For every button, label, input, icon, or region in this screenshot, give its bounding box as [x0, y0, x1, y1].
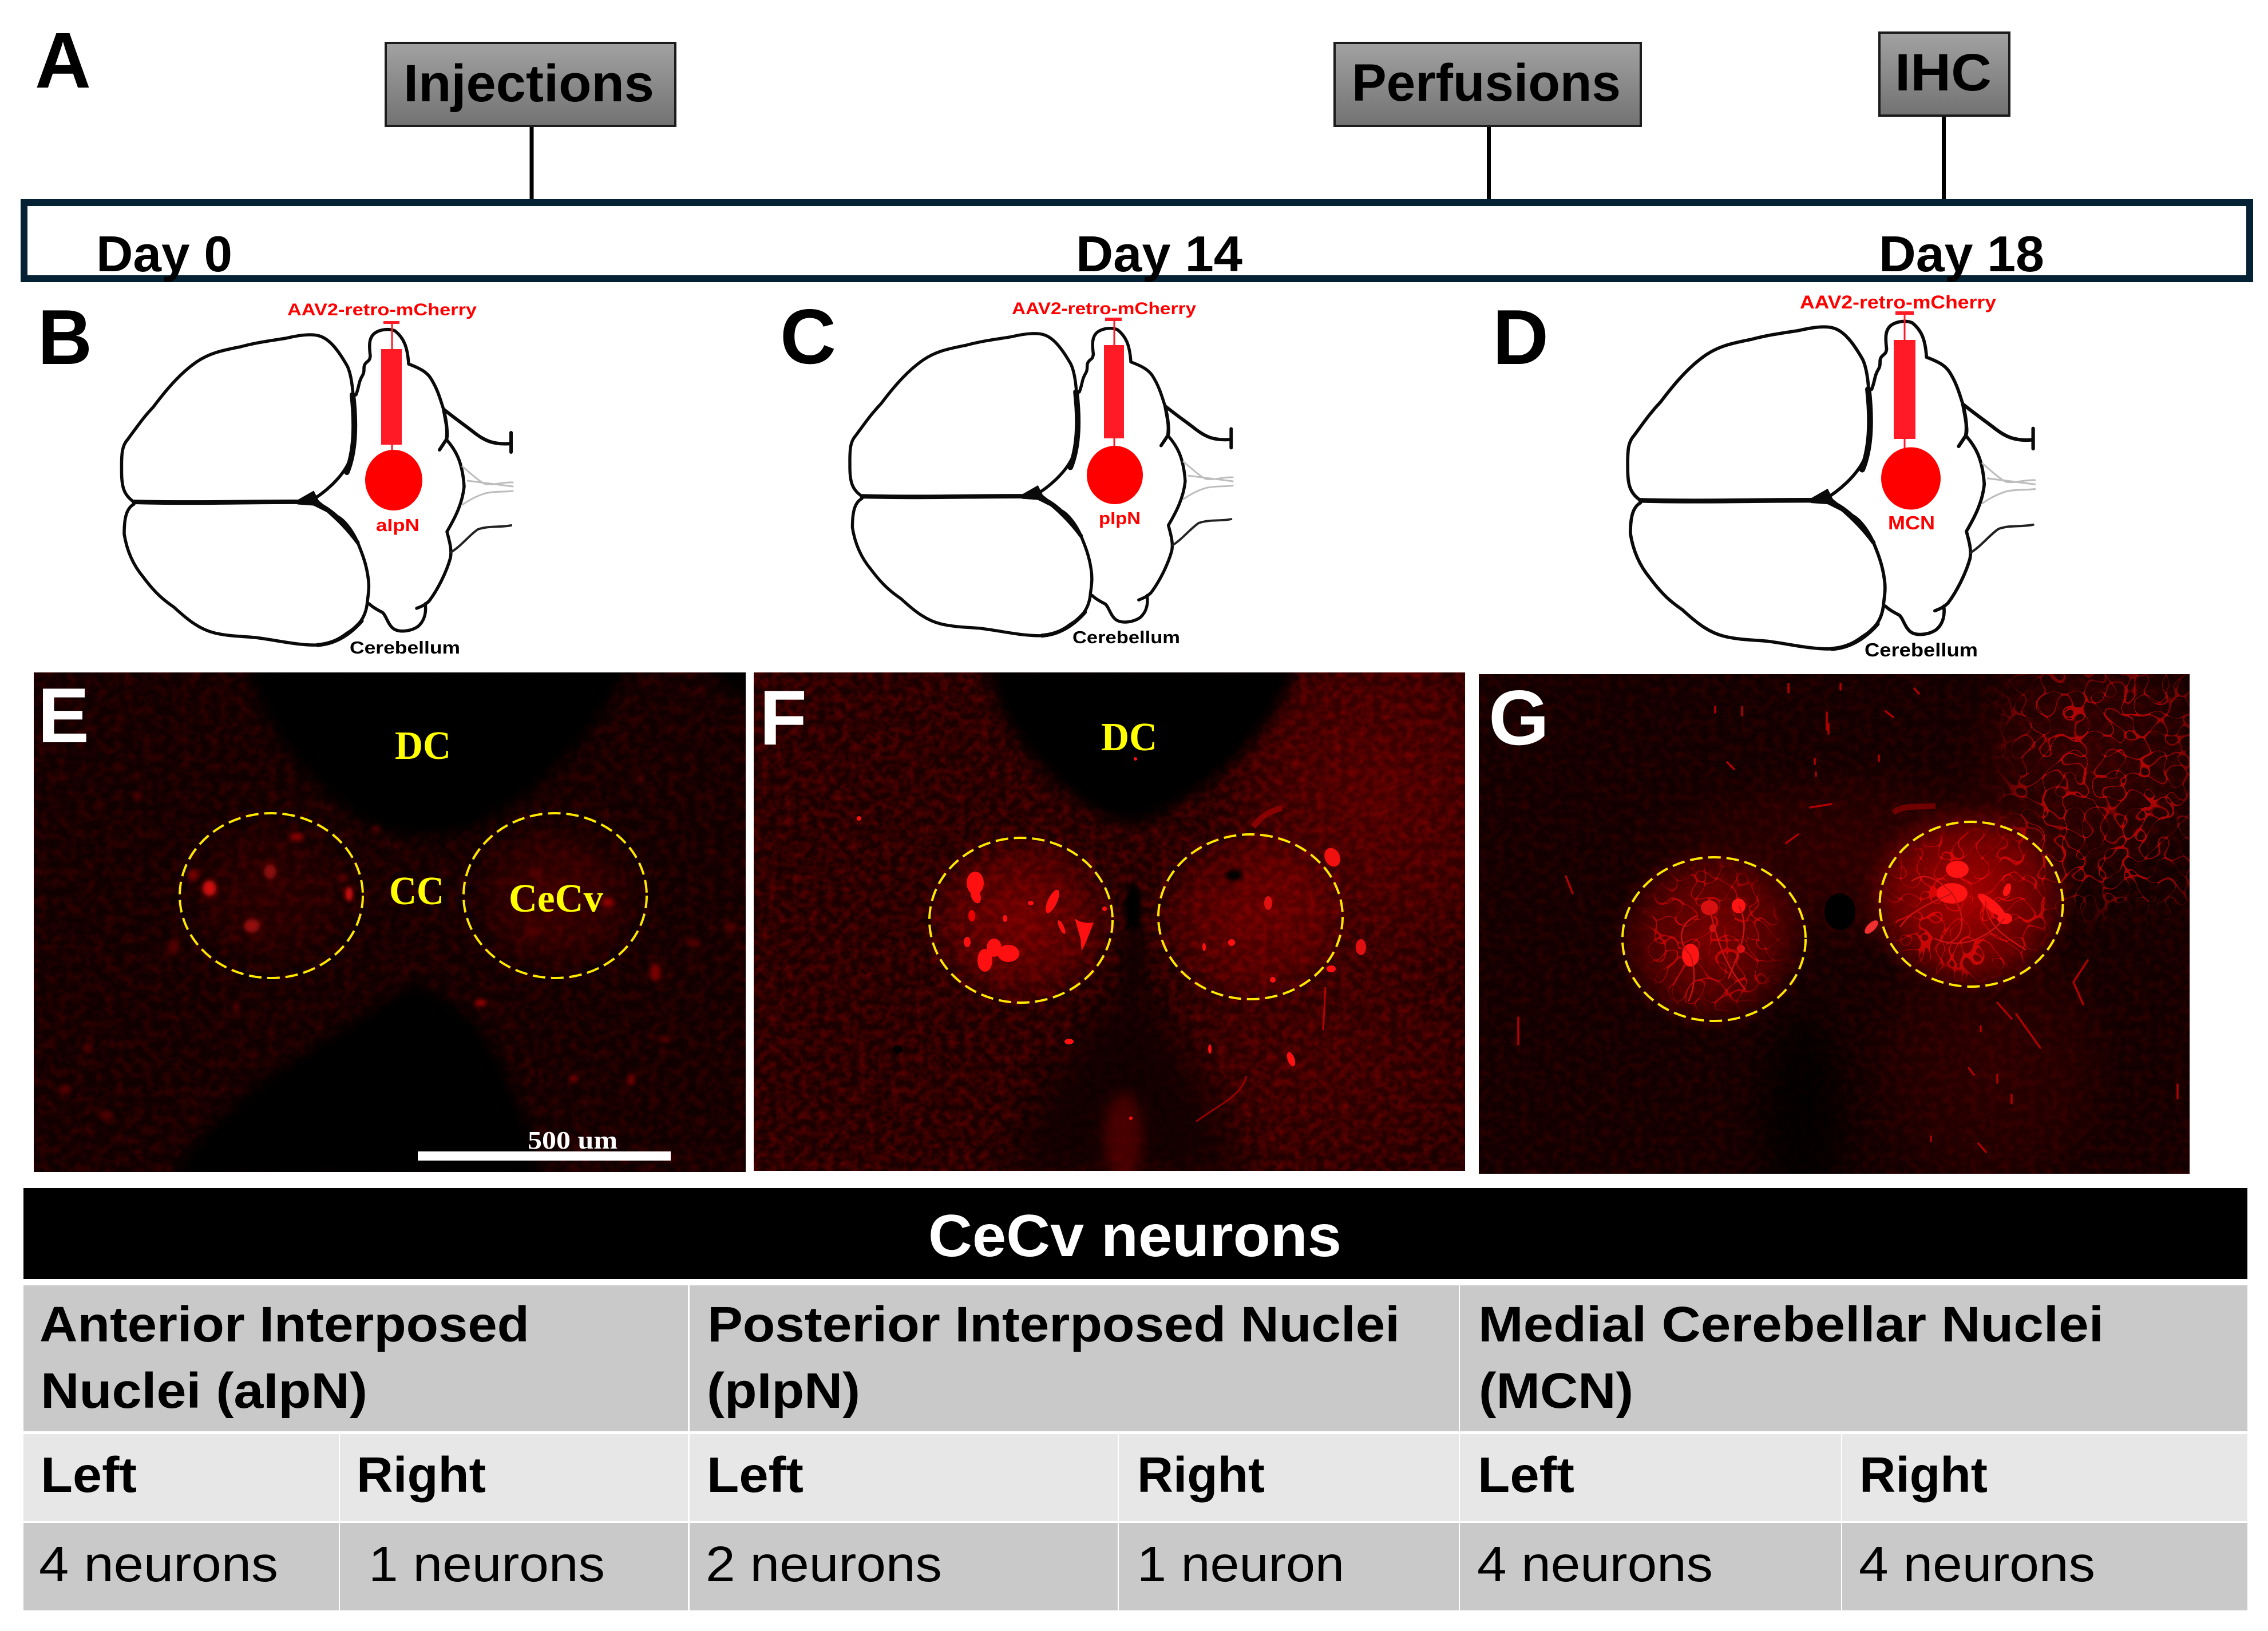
table title bar: CeCv neurons	[928, 1203, 1341, 1269]
injection site	[365, 450, 422, 510]
scale bar	[418, 1151, 671, 1161]
labelled neurons	[1681, 861, 2026, 1001]
cerebellum label: Cerebellum	[350, 638, 460, 658]
cerebellum label: Cerebellum	[1072, 627, 1180, 647]
panel D: MCN injection schematic	[1493, 292, 2035, 660]
side header row: Right	[357, 1447, 486, 1503]
panel letter A: A	[35, 17, 91, 105]
panel letter F: F	[759, 674, 807, 761]
side header row: Left	[1478, 1447, 1574, 1503]
neuron count row: 2 neurons	[706, 1537, 942, 1592]
box: Injections	[386, 43, 675, 126]
central canal	[1824, 893, 1855, 930]
brain outline	[1628, 322, 2035, 649]
CeCv outline: left	[929, 838, 1113, 1003]
panel E: micrograph aIpN	[34, 664, 750, 1179]
connector: injections	[530, 125, 533, 203]
neuron count row	[23, 1523, 2247, 1610]
box: IHC	[1879, 33, 2009, 116]
box: Perfusions	[1335, 43, 1641, 126]
timeline label: Day 18: Day 18	[1879, 225, 2044, 282]
connector: perfusions	[1487, 125, 1491, 203]
side header row: Right	[1859, 1447, 1988, 1503]
connector: IHC	[1942, 114, 1946, 203]
CeCv outline: right	[464, 813, 647, 978]
side header row: Left	[707, 1447, 804, 1503]
column header: pIpN: (pIpN)	[707, 1363, 860, 1419]
panel letter B: B	[38, 294, 92, 381]
neuron count row: 1 neuron	[1137, 1537, 1344, 1592]
injection site	[1881, 448, 1941, 509]
panel G: micrograph MCN	[1479, 635, 2226, 1230]
nucleus label: MCN	[1888, 512, 1935, 533]
column header: aIpN: Anterior Interposed	[39, 1297, 529, 1352]
nucleus label: aIpN	[376, 515, 419, 535]
timeline bar	[24, 203, 2250, 279]
label: CC: CC	[389, 869, 444, 913]
brain outline	[121, 330, 513, 645]
injection site	[1087, 446, 1143, 504]
cerebellum label: Cerebellum	[1865, 639, 1978, 660]
column header: MCN: Medial Cerebellar Nuclei	[1478, 1297, 2104, 1352]
neuron count row: 4 neurons	[1859, 1537, 2095, 1592]
panel A: experimental timeline	[24, 17, 2250, 282]
table title bar	[23, 1188, 2247, 1279]
side header row: Left	[41, 1447, 137, 1503]
brain outline	[850, 328, 1233, 636]
panel C: pIpN injection schematic	[780, 293, 1233, 647]
CeCv outline: left	[180, 813, 363, 978]
virus label: AAV2-retro-mCherry	[287, 300, 477, 319]
syringe	[381, 321, 402, 452]
panel letter C: C	[780, 293, 836, 380]
box: Perfusions: Perfusions	[1352, 54, 1621, 112]
panel B: aIpN injection schematic	[38, 294, 513, 658]
timeline label: Day 14: Day 14	[1076, 225, 1242, 282]
column header: aIpN: Nuclei (aIpN)	[41, 1363, 367, 1419]
timeline label: Day 0: Day 0	[96, 225, 232, 282]
scale label: 500 um	[528, 1126, 618, 1154]
neuron count row: 4 neurons	[39, 1537, 278, 1592]
neuron count row: 4 neurons	[1477, 1537, 1713, 1592]
CeCv outline: right	[1158, 834, 1343, 999]
virus label: AAV2-retro-mCherry	[1800, 292, 1996, 312]
syringe	[1894, 311, 1915, 448]
axon fragments	[1518, 684, 2178, 1152]
virus label: AAV2-retro-mCherry	[1012, 299, 1196, 318]
column header: pIpN: Posterior Interposed Nuclei	[707, 1297, 1400, 1352]
labelled neurons	[857, 757, 1366, 1122]
label: DC: DC	[395, 724, 451, 768]
CeCv outline: right	[1879, 822, 2063, 987]
label: CeCv: CeCv	[509, 877, 603, 921]
column header: MCN: (MCN)	[1479, 1363, 1633, 1419]
neuron count row: 1 neurons	[369, 1537, 605, 1592]
side header row: Right	[1137, 1447, 1265, 1503]
label: DC: DC	[1101, 715, 1157, 759]
labelled neurons	[59, 773, 737, 1119]
panel letter G: G	[1489, 674, 1549, 761]
syringe	[1104, 318, 1124, 446]
CeCv outline: left	[1622, 857, 1806, 1021]
nucleus label: pIpN	[1099, 508, 1141, 528]
box: Injections: Injections	[403, 54, 654, 113]
column header: MCN	[1460, 1285, 2247, 1431]
column header: aIpN	[23, 1285, 688, 1431]
column header: pIpN	[690, 1285, 1459, 1431]
panel letter E: E	[38, 672, 89, 759]
box: IHC: IHC	[1895, 43, 1992, 102]
table: CeCv neuron counts	[23, 1188, 2247, 1610]
panel letter D: D	[1493, 294, 1549, 381]
panel F: micrograph pIpN	[754, 607, 1534, 1190]
side header row	[23, 1434, 2247, 1521]
